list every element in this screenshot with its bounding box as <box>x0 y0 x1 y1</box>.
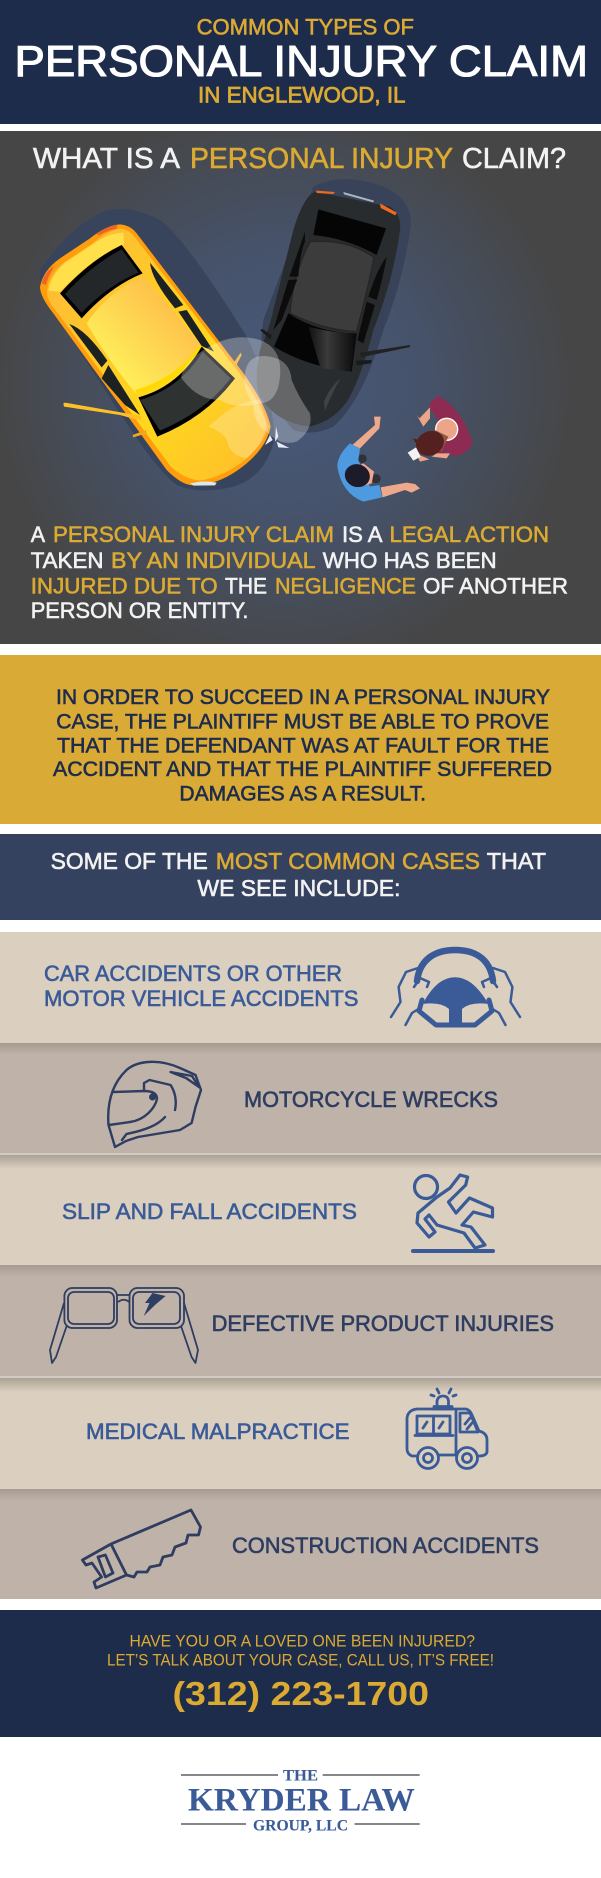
row: construction accidents <box>0 1489 601 1599</box>
illustration: woman with phone <box>408 396 473 462</box>
defective products label: DEFECTIVE PRODUCT INJURIES <box>212 1311 554 1336</box>
call to action text: HAVE YOU OR A LOVED ONE BEEN INJURED? <box>130 1632 475 1651</box>
panel body text: WHO HAS BEEN <box>323 548 497 573</box>
cases heading text: MOST COMMON CASES <box>216 848 480 874</box>
icon: broken glasses <box>50 1288 198 1363</box>
icon: ambulance <box>407 1389 487 1468</box>
panel body text: BY AN INDIVIDUAL <box>111 548 316 573</box>
burden of proof text <box>53 686 552 805</box>
panel body text: OF ANOTHER <box>423 574 568 598</box>
car accidents label <box>44 961 358 1011</box>
call to action text <box>107 1632 494 1670</box>
panel heading: WHAT IS A <box>33 143 181 175</box>
cases heading text: WE SEE INCLUDE: <box>197 875 400 901</box>
slip and fall label: SLIP AND FALL ACCIDENTS <box>62 1199 357 1224</box>
panel: burden of proof <box>0 655 601 824</box>
panel heading <box>33 143 566 175</box>
logo: the kryder law group: GROUP, LLC <box>253 1818 348 1835</box>
cases heading text: THAT <box>487 848 546 874</box>
icon: hand saw <box>82 1510 200 1588</box>
panel body text: INJURED DUE TO <box>31 574 218 598</box>
panel body text: PERSON OR ENTITY. <box>31 598 248 623</box>
row: car accidents <box>0 932 601 1043</box>
panel: call to action <box>0 1610 601 1737</box>
car accidents label: MOTOR VEHICLE ACCIDENTS <box>44 986 358 1011</box>
header kicker: COMMON TYPES OF <box>197 14 414 40</box>
burden of proof text: CASE, THE PLAINTIFF MUST BE ABLE TO PROVE <box>56 710 549 733</box>
icon: person slipping <box>411 1175 495 1253</box>
logo: the kryder law group: KRYDER LAW <box>188 1783 415 1819</box>
phone number: (312) 223-1700 <box>172 1675 429 1712</box>
logo: the kryder law group: THE <box>283 1768 318 1785</box>
panel body text: TAKEN <box>31 548 104 573</box>
medical malpractice label: MEDICAL MALPRACTICE <box>86 1419 350 1444</box>
icon: steering wheel with hands <box>391 950 520 1026</box>
burden of proof text: THAT THE DEFENDANT WAS AT FAULT FOR THE <box>57 734 549 757</box>
logo: the kryder law group <box>181 1768 420 1835</box>
panel: what is a personal injury claim <box>0 131 601 644</box>
location line: IN ENGLEWOOD, IL <box>198 82 406 107</box>
panel body text: A <box>31 522 45 547</box>
panel body text: PERSONAL INJURY CLAIM <box>53 522 334 547</box>
panel body text <box>31 522 568 623</box>
illustration: black car <box>257 179 411 433</box>
burden of proof text: ACCIDENT AND THAT THE PLAINTIFF SUFFERED <box>53 758 552 781</box>
panel body text: LEGAL ACTION <box>390 522 549 547</box>
panel: header <box>0 0 601 124</box>
panel heading: PERSONAL INJURY <box>190 143 453 175</box>
icon: helmet <box>108 1062 201 1147</box>
illustration: smoke <box>181 337 311 458</box>
panel body text: THE <box>225 574 267 598</box>
burden of proof text: IN ORDER TO SUCCEED IN A PERSONAL INJURY <box>56 686 550 709</box>
illustration: man in blue shirt <box>337 417 420 502</box>
row: medical malpractice <box>0 1378 601 1489</box>
construction accidents label: CONSTRUCTION ACCIDENTS <box>232 1533 539 1558</box>
panel body text: IS A <box>342 522 382 547</box>
motorcycle wrecks label: MOTORCYCLE WRECKS <box>244 1087 498 1112</box>
panel body text: NEGLIGENCE <box>275 574 416 598</box>
burden of proof text: DAMAGES AS A RESULT. <box>179 782 426 805</box>
panel heading: CLAIM? <box>462 143 566 175</box>
illustration: yellow car <box>40 209 275 490</box>
main title: PERSONAL INJURY CLAIM <box>14 38 588 86</box>
car accidents label: CAR ACCIDENTS OR OTHER <box>44 961 342 986</box>
panel: most common cases heading <box>0 834 601 920</box>
row: defective products <box>0 1265 601 1378</box>
cases heading text: SOME OF THE <box>51 848 208 874</box>
row: slip and fall <box>0 1155 601 1265</box>
cases heading text <box>51 848 546 901</box>
call to action text: LET’S TALK ABOUT YOUR CASE, CALL US, IT’S FREE! <box>107 1651 494 1670</box>
row: motorcycle wrecks <box>0 1043 601 1155</box>
